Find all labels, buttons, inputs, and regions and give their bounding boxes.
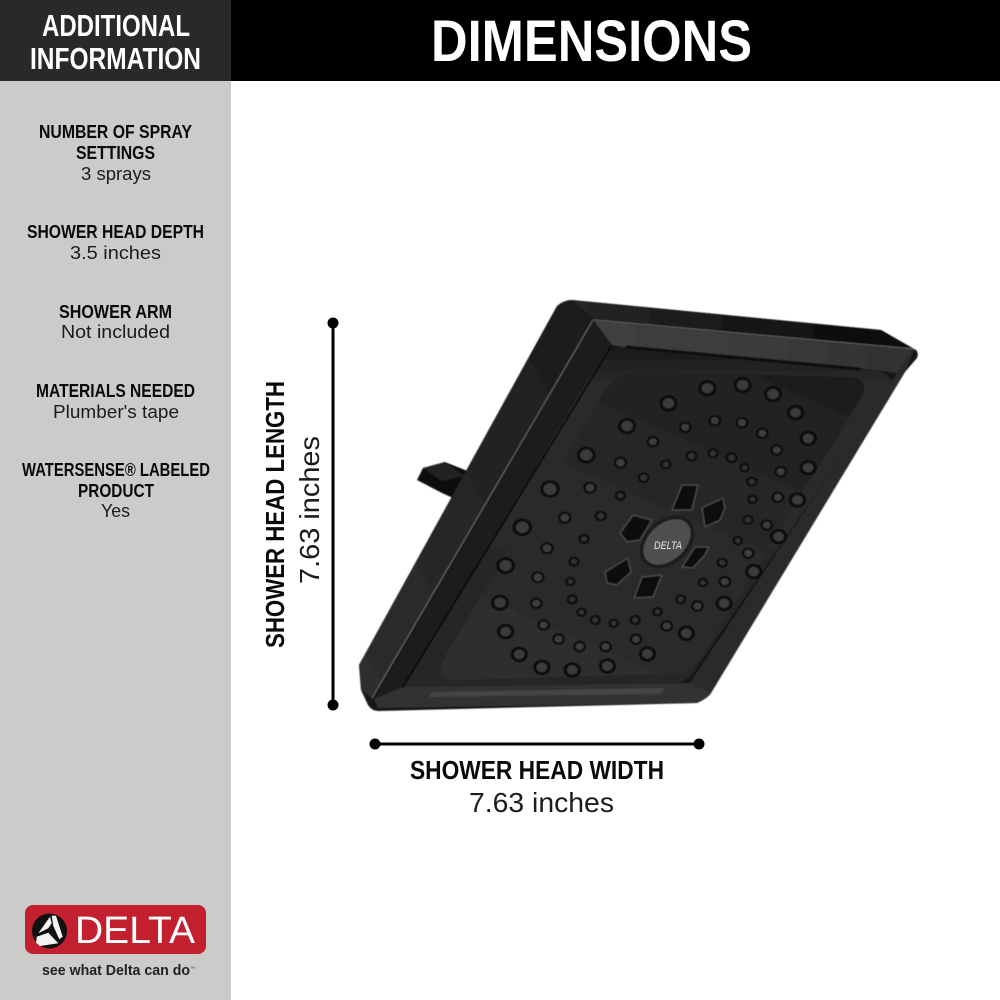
spec: watersense labeled product: Yes <box>101 501 130 521</box>
top shadow crease <box>626 347 860 369</box>
bottom highlight <box>428 688 665 697</box>
top edge face <box>572 300 914 349</box>
panel: additional information sidebar <box>0 0 231 1000</box>
head body <box>359 300 918 711</box>
bottom bezel band <box>374 683 711 708</box>
tagline: ™ <box>190 966 195 972</box>
sidebar heading: INFORMATION <box>30 41 201 76</box>
spec: shower arm: Not included <box>61 322 170 342</box>
length dimension line <box>328 318 338 710</box>
spec: number of spray settings: NUMBER OF SPRAY <box>39 122 192 142</box>
spec: shower arm <box>59 302 172 342</box>
spec: number of spray settings <box>39 122 192 184</box>
delta logo: DELTA <box>75 910 196 952</box>
spec: watersense labeled product: WATERSENSE® LABELED <box>22 460 210 480</box>
inner ring of spray holes <box>566 449 757 627</box>
middle ring of spray holes <box>531 416 786 651</box>
centre nozzles <box>605 485 725 598</box>
spec: materials needed: MATERIALS NEEDED <box>36 381 195 401</box>
outer ring of spray holes <box>493 378 815 676</box>
badge wordmark: DELTA <box>654 540 682 552</box>
main heading bar <box>231 0 1000 81</box>
width label: SHOWER HEAD WIDTH <box>410 755 664 785</box>
spec: watersense labeled product <box>22 460 210 521</box>
width dimension line <box>370 738 704 750</box>
length label <box>260 381 325 648</box>
length label: SHOWER HEAD LENGTH <box>260 381 290 648</box>
spec: number of spray settings: SETTINGS <box>76 143 155 163</box>
spec: shower arm: SHOWER ARM <box>59 302 172 322</box>
arm mount tab <box>417 462 475 498</box>
width label: 7.63 inches <box>469 787 614 818</box>
left shadow crease <box>403 345 612 687</box>
top highlight <box>594 320 914 349</box>
spray holes <box>493 378 815 676</box>
spec: shower head depth: 3.5 inches <box>70 243 161 263</box>
spec: watersense labeled product: PRODUCT <box>78 481 154 501</box>
spec: materials needed: Plumber's tape <box>53 402 179 422</box>
spec: materials needed <box>36 381 195 422</box>
left side face <box>359 300 592 698</box>
crease highlight <box>372 320 593 698</box>
spec: shower head depth <box>27 222 204 263</box>
icon: delta emblem <box>32 914 67 948</box>
right bezel band <box>690 350 914 693</box>
centre badge <box>632 508 702 576</box>
sidebar heading <box>0 0 231 81</box>
shower head illustration <box>359 300 918 711</box>
delta logo <box>25 905 206 979</box>
left bezel band <box>374 321 612 699</box>
main heading bar: DIMENSIONS <box>431 9 752 74</box>
inner tier <box>403 347 891 687</box>
spec: number of spray settings: 3 sprays <box>81 164 151 184</box>
recessed face <box>441 372 864 680</box>
sidebar heading: ADDITIONAL <box>42 8 190 43</box>
tagline: see what Delta can do <box>42 962 190 979</box>
spec: shower head depth: SHOWER HEAD DEPTH <box>27 222 204 242</box>
length label: 7.63 inches <box>294 436 325 584</box>
top bezel band <box>594 321 914 373</box>
width label <box>410 755 664 818</box>
